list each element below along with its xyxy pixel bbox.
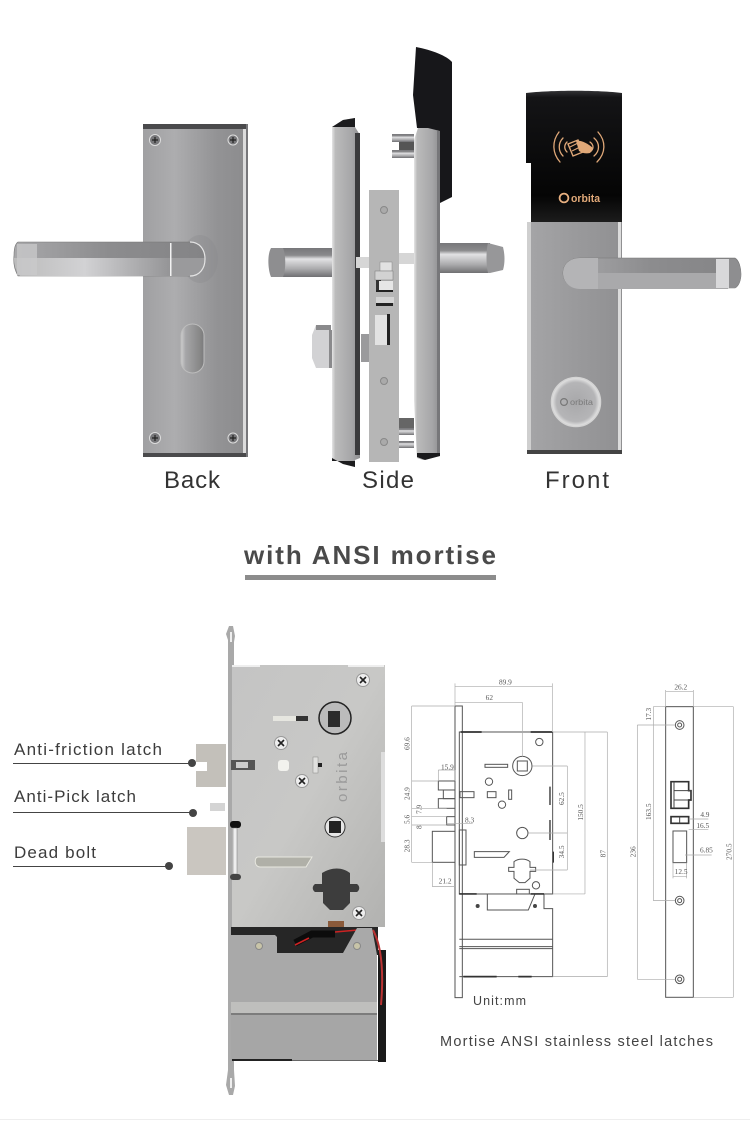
- dead bolt: [187, 827, 226, 875]
- faceplate: [226, 626, 235, 1095]
- dimension values: 26.2: [674, 682, 687, 691]
- lock view: front: [526, 91, 741, 454]
- side front reader body: [413, 47, 452, 203]
- unit note: Unit:mm: [473, 994, 526, 1008]
- callout: Dead bolt: [13, 843, 173, 870]
- mortise lock photo: [187, 626, 386, 1095]
- heading underline: [245, 575, 496, 580]
- dimension values: [628, 682, 733, 876]
- technical drawing: case side view: [402, 677, 607, 998]
- faceplate outline: [666, 707, 693, 997]
- back plate: [143, 124, 248, 457]
- dimension values: 163.5: [644, 803, 653, 820]
- callout: Anti-friction latch: Anti-friction latch: [14, 740, 162, 759]
- callout: Dead bolt: Dead bolt: [14, 843, 96, 862]
- mortise case: [230, 665, 385, 928]
- dimension values: 87: [598, 850, 607, 857]
- dimension values: 62: [486, 693, 493, 702]
- caption: Front: Front: [545, 467, 609, 494]
- dimension values: 21.2: [439, 876, 452, 885]
- front steel plate: [527, 222, 622, 454]
- dimension values: 270.5: [724, 843, 733, 860]
- dimension values: 4.9: [700, 810, 710, 819]
- dimension values: 15.9: [441, 762, 454, 771]
- dimension values: 8.3: [465, 816, 474, 825]
- dimension values: 5.6: [402, 814, 411, 824]
- dimension values: 69.6: [402, 737, 411, 750]
- side back plate: [332, 118, 360, 467]
- back lever handle: [14, 235, 218, 283]
- dimension values: 12.5: [675, 867, 688, 876]
- callout: Anti-friction latch: [13, 740, 196, 767]
- lock view: back: [14, 124, 248, 457]
- caption: Side: Side: [362, 467, 414, 494]
- section heading: with ANSI mortise: [243, 540, 496, 570]
- side front plate: [414, 128, 440, 460]
- dimension values: [402, 677, 607, 885]
- drawing caption: Mortise ANSI stainless steel latches: [440, 1034, 713, 1050]
- front black reader panel: [526, 91, 622, 222]
- dimension values: 89.9: [499, 677, 512, 686]
- technical drawing: faceplate front view: [628, 682, 733, 997]
- callout: Anti-Pick latch: [13, 787, 197, 817]
- front cylinder cover: orbita: [570, 398, 594, 407]
- mounting posts: [392, 134, 414, 448]
- dimension values: 6.85: [700, 846, 713, 855]
- dimension values: 236: [628, 846, 637, 857]
- dimension values: 150.5: [576, 804, 585, 821]
- orbita logo: orbita: [571, 193, 601, 205]
- dimension values: 8: [415, 825, 424, 829]
- caption: Back: Back: [164, 467, 221, 494]
- dimension values: 16.5: [696, 821, 709, 830]
- dimension values: 17.3: [644, 708, 653, 721]
- spindle: [356, 253, 416, 268]
- dimension lines: [412, 683, 607, 977]
- anti-pick latch bolt: [210, 803, 225, 811]
- thumb-turn: [312, 325, 369, 368]
- dimension values: 7.9: [415, 804, 424, 814]
- icon: contactless card: [554, 132, 604, 162]
- callout: Anti-Pick latch: Anti-Pick latch: [14, 787, 136, 806]
- back thumb-turn slot: [181, 324, 204, 373]
- dimension lines: [637, 690, 733, 997]
- drawing outline: [432, 706, 553, 998]
- dimension values: 62.5: [557, 792, 566, 805]
- mortise faceplate: [369, 190, 399, 462]
- side back handle: [268, 248, 332, 277]
- side front handle: [440, 243, 504, 273]
- dimension values: 24.9: [402, 787, 411, 800]
- dimension values: 34.5: [557, 845, 566, 858]
- front cylinder cover: [552, 378, 600, 426]
- anti-friction latch bolt: [196, 744, 226, 787]
- dimension values: 28.3: [402, 839, 411, 852]
- front lever handle: [563, 258, 741, 289]
- motor compartment: [231, 927, 386, 1062]
- mortise case: orbita: [334, 751, 351, 802]
- lock view: side exploded: [268, 47, 504, 467]
